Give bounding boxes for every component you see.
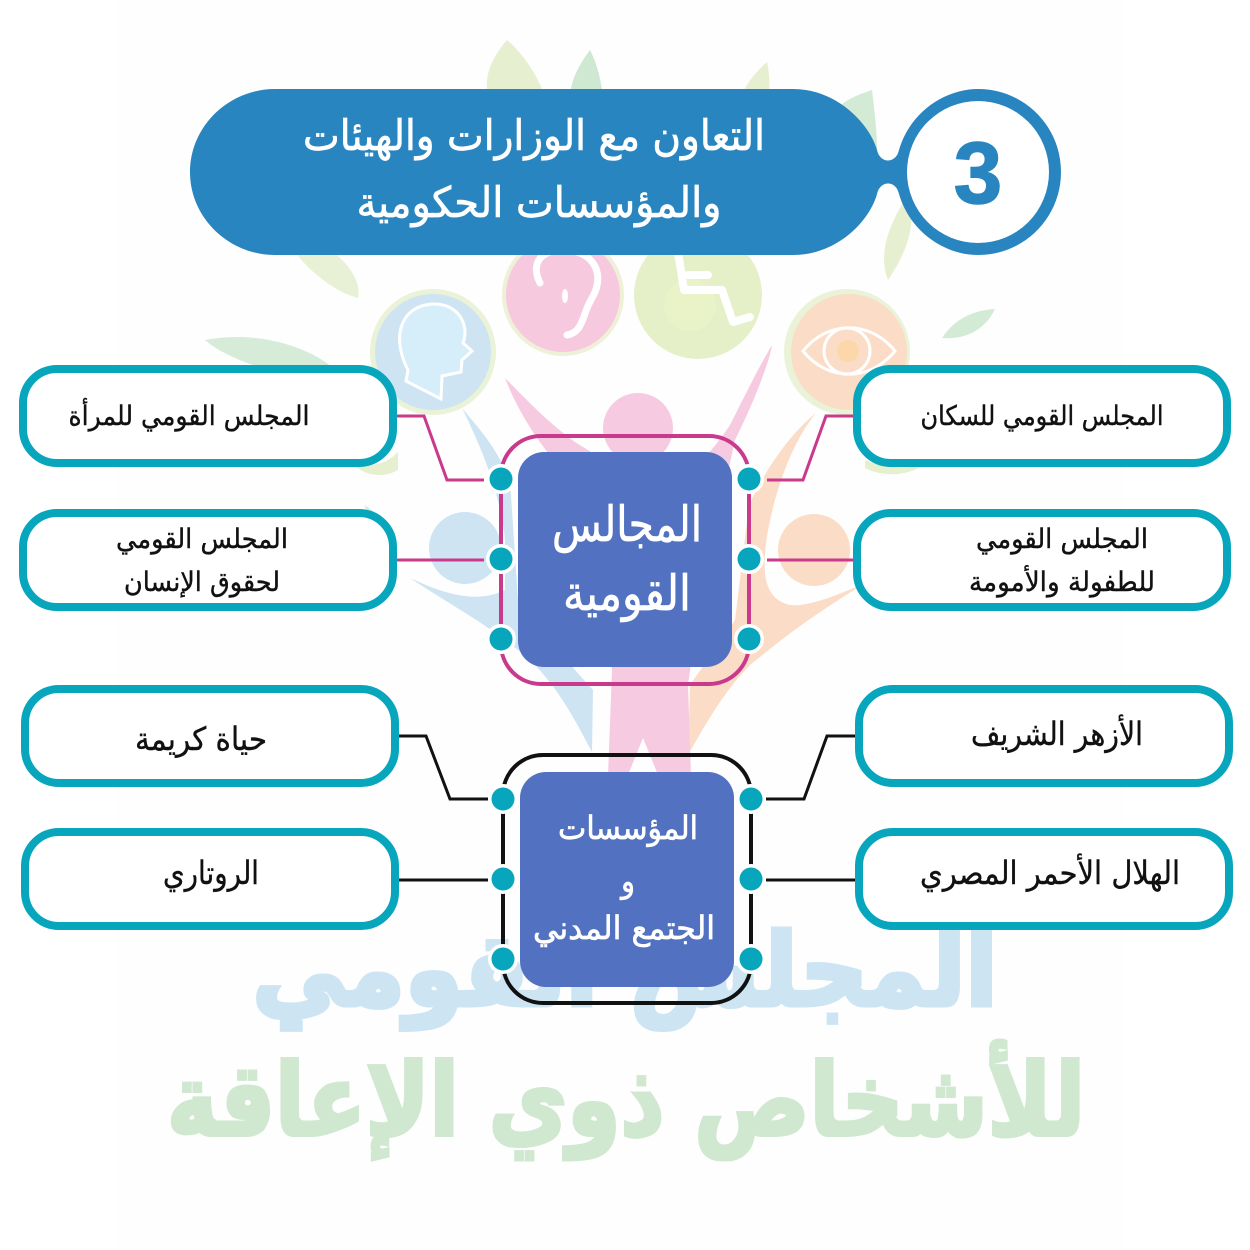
icon: ear	[502, 234, 624, 356]
box: National Council for Human Rights	[23, 513, 393, 607]
panel: institutions and civil society hub	[492, 755, 762, 1003]
box: National Population Council	[857, 369, 1227, 463]
box: Al-Azhar: الأزهر الشريف	[971, 714, 1143, 753]
number badge	[907, 101, 1049, 243]
connector dots	[490, 468, 760, 650]
hub title	[552, 496, 702, 622]
background logo: organisation name watermark: المجلس القومي	[252, 912, 998, 1030]
icon: eye	[784, 289, 910, 415]
box: Rotary	[25, 832, 395, 926]
box: Rotary: الروتاري	[163, 854, 259, 892]
title text: والمؤسسات الحكومية	[356, 178, 722, 227]
background logo: organisation name watermark	[167, 912, 1085, 1160]
title text: التعاون مع الوزارات والهيئات	[303, 111, 765, 161]
box: National Population Council: المجلس القومي للسكان	[920, 401, 1164, 432]
hub title: المؤسسات	[558, 809, 698, 847]
number badge: 3	[954, 125, 1002, 222]
panel: national councils hub	[490, 436, 760, 684]
title banner	[190, 89, 1061, 255]
box: Egyptian Red Crescent: الهلال الأحمر المصري	[920, 853, 1180, 892]
box: National Council for Childhood and Motherhood: للطفولة والأمومة	[969, 564, 1155, 598]
title text	[303, 111, 765, 227]
connector dots	[492, 788, 762, 970]
box: National Council for Childhood and Motherhood: المجلس القومي	[976, 524, 1148, 555]
box: Egyptian Red Crescent	[859, 832, 1229, 926]
icon: head	[370, 289, 496, 415]
background logo: three raised-arm figures	[410, 345, 862, 775]
hub title: و	[619, 862, 635, 900]
box: Haya Karima: حياة كريمة	[135, 720, 267, 758]
box: National Council for Women	[23, 369, 393, 463]
connectors: national councils	[396, 416, 854, 560]
box: Haya Karima	[25, 689, 395, 783]
connectors: institutions and civil society	[398, 736, 855, 880]
icon: wheelchair	[634, 231, 762, 359]
hub title: المجالس	[552, 496, 702, 553]
background logo: leaves	[205, 40, 995, 560]
box: National Council for Women: المجلس القومي للمرأة	[68, 397, 310, 432]
hub title: الجتمع المدني	[533, 909, 715, 947]
background logo: disability icon circles	[370, 231, 910, 415]
box: Al-Azhar	[859, 689, 1229, 783]
box: National Council for Childhood and Motherhood	[857, 513, 1227, 607]
box: National Council for Human Rights: المجلس القومي	[116, 524, 288, 555]
hub title	[533, 809, 715, 947]
box: National Council for Human Rights: لحقوق الإنسان	[124, 567, 280, 598]
background logo: organisation name watermark: للأشخاص ذوي الإعاقة	[167, 1040, 1085, 1160]
hub title: القومية	[563, 565, 691, 622]
